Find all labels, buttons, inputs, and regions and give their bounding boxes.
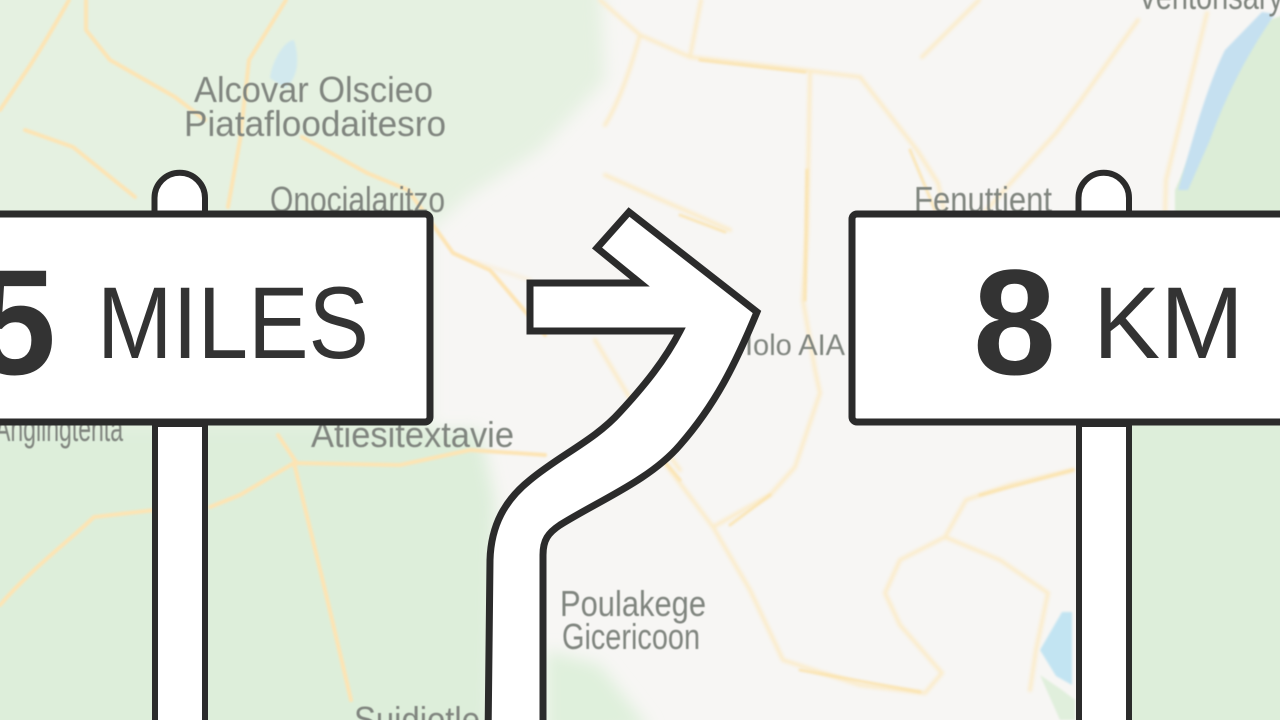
- left sign post: [154, 173, 205, 720]
- label: below left sign: Atiesitextavie: [311, 414, 514, 455]
- left sign: 5 miles: [0, 214, 430, 422]
- bent arrow pointing right: [488, 212, 757, 720]
- label: upper park line 1: Alcovar Olscieo: [194, 69, 433, 110]
- park: right green area: [1040, 10, 1280, 720]
- label: above left sign: Onocialaritzo: [270, 179, 445, 220]
- roads: city: [475, 0, 1207, 693]
- unit MILES: MILES: [97, 266, 369, 380]
- label: below left sign far left: Angiingtenta: [0, 408, 124, 449]
- right sign post: [1078, 173, 1129, 720]
- value 8: 8: [973, 238, 1056, 406]
- label: lower centre line 1: Poulakege: [560, 583, 706, 624]
- post shaft: [155, 424, 205, 720]
- sign board: [852, 214, 1280, 422]
- roads: stronger segments: [655, 60, 1073, 692]
- label: upper park line 2: Piatafloodaitesro: [184, 103, 446, 144]
- post hanger top: [154, 173, 205, 214]
- unit KM: KM: [1093, 266, 1244, 380]
- label: beside arrow tip: Iolo AIA: [745, 329, 845, 362]
- sign board: [0, 214, 430, 422]
- roads: parkland: [0, 0, 545, 700]
- label: above right sign: Fenuttient: [914, 179, 1052, 220]
- post hanger top: [1078, 173, 1129, 214]
- water: lakes and river: [270, 12, 1275, 685]
- right sign: 8 km: [852, 214, 1280, 422]
- park: left green area: [0, 0, 650, 720]
- post shaft: [1079, 424, 1129, 720]
- label: lower centre line 2: Gicericoon: [562, 616, 700, 657]
